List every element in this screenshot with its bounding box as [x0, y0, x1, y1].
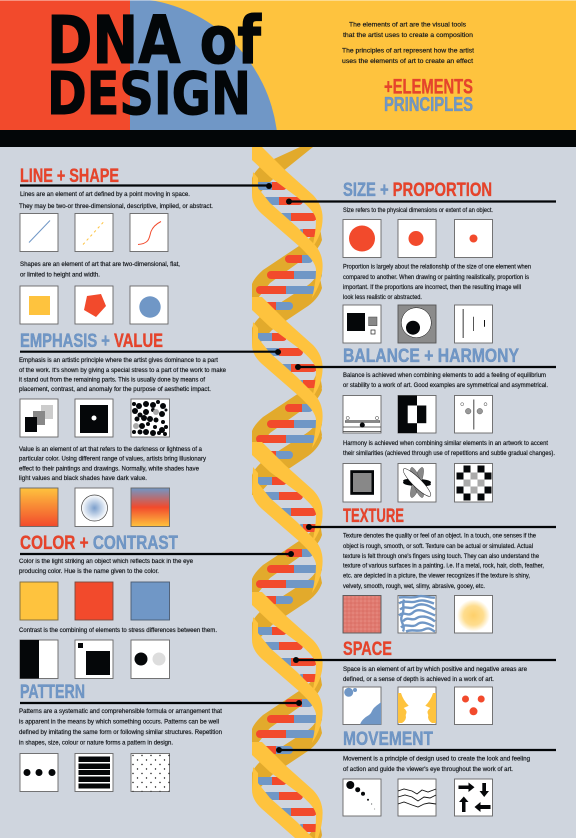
icon: blue wavy texture: [398, 596, 436, 633]
icon: black and white halves: [20, 640, 58, 678]
text: pattern: Patterns are a systematic and comprehensible formula or arrangement that: [19, 708, 222, 715]
icon: black square with white spot: [75, 399, 113, 437]
icon: eye circle: [398, 305, 436, 343]
text: value: [19, 446, 207, 482]
text: emphasis: [18, 357, 228, 393]
icon: yellow to red gradient: [20, 488, 58, 526]
icon: large circle: [343, 220, 381, 258]
callout lines: [20, 183, 556, 753]
panel: space: [343, 638, 527, 724]
text: color: producing color. Hue is the name given to the color.: [19, 568, 159, 575]
legend: elements and principles: +ELEMENTS: [384, 76, 473, 98]
icon: yellow swatch: [20, 582, 58, 620]
text: balance: [343, 372, 548, 389]
icon: small and large squares: [75, 640, 113, 678]
panel: size + proportion: [343, 179, 531, 343]
header intro text: The principles of art represent how the artist: [342, 48, 474, 54]
icon: three dots: [20, 754, 58, 792]
heading: space: SPACE: [343, 638, 392, 660]
icon: straight line: [20, 214, 58, 252]
text: space: Space is an element of art by which positive and negative areas are: [343, 666, 527, 673]
header intro text: [342, 22, 474, 65]
text: proportion: important. If the proportions are incorrect, then the resulting image will: [343, 284, 521, 291]
heading: texture: TEXTURE: [343, 505, 404, 527]
icon: blue red yellow gradient: [131, 488, 170, 526]
text: pattern: in shapes, size, colour or nature forms a pattern in design.: [19, 739, 173, 746]
icon: soft yellow blur: [454, 596, 492, 633]
icon: yellow facing profiles: [398, 687, 436, 724]
text: pattern: is apparent in the means by which something occurs. Patterns can be well: [19, 718, 219, 725]
text: texture: texture is felt through one's fingers using touch. They can also understand the: [343, 553, 539, 560]
text: line: Lines are an element of art defined by a point moving in space.: [20, 191, 190, 198]
icon: square: [20, 286, 58, 324]
text: shape: Shapes are an element of art that are two-dimensional, flat,: [20, 261, 180, 268]
icon: three vertical lines: [454, 305, 492, 343]
icon: balance scale: [343, 396, 381, 433]
icon: pentagon: [75, 286, 113, 324]
text: texture: [343, 532, 544, 590]
header banner: [0, 0, 576, 147]
icon: dot pattern: [131, 754, 170, 792]
text: space: defined, or a sense of depth is achieved in a work of art.: [343, 676, 494, 683]
text: texture: velvety, smooth, rough, wet, slimy, abrasive, gooey, etc.: [343, 583, 485, 590]
DNA helix: [252, 147, 323, 838]
icon: black and white symmetry: [398, 396, 436, 433]
icon: nested squares: [343, 464, 381, 502]
text: balance: or stability to a work of art. Good examples are symmetrical and asymmetrical.: [343, 382, 548, 389]
icon: petal flower: [398, 464, 436, 502]
text: emphasis: it stand out from the remaining parts. This is usually done by means of: [19, 376, 205, 384]
title: DESIGN: [47, 59, 251, 128]
text: movement: [343, 756, 530, 773]
icon: checkerboard: [454, 464, 492, 502]
text: pattern: defined by imitating the same form or following similar structures. Repetition: [19, 729, 222, 736]
text: emphasis: of the work. It's shown by giving a special stress to a part of the work to make: [19, 367, 226, 374]
icon: four arrows: [454, 779, 492, 816]
icon: medium circle: [398, 220, 436, 258]
text: harmony: [343, 440, 555, 457]
text: proportion: Proportion is largely about the relationship of the size of one element when: [343, 264, 531, 270]
icon: black and grey circles: [131, 640, 170, 678]
text: value: Value is an element of art that refers to the darkness or lightness of a: [19, 446, 202, 453]
text: proportion: [343, 264, 531, 301]
text: line: [19, 191, 213, 210]
text: texture: etc. are depicted in a picture, the viewer recognizes if the texture is shiny,: [343, 572, 530, 580]
text: color: Color is the light striking an object which reflects back in the eye: [19, 558, 193, 565]
icon: scattered dots: [131, 399, 170, 437]
text: texture: texture of various surfaces in a painting. i.e. If a metal, rock, hair, cloth, feather,: [343, 562, 544, 570]
legend: elements and principles: PRINCIPLES: [384, 94, 473, 116]
header intro text: uses the elements of art to create an effect: [342, 58, 473, 65]
icon: overlapping squares: [20, 399, 58, 437]
title: [47, 2, 262, 128]
icon: stripes: [75, 754, 113, 792]
text: emphasis: Emphasis is an artistic principle where the artist gives dominance to a part: [19, 357, 218, 364]
panel: balance + harmony: [343, 345, 555, 502]
text: value: particular color. Using different range of values, artists bring illusionary: [19, 456, 207, 462]
heading: line + shape: LINE + SHAPE: [20, 165, 119, 187]
heading: size + proportion: SIZE + PROPORTION: [343, 179, 492, 201]
icon: mirrored circles: [454, 396, 492, 433]
text: proportion: look less realistic or abstracted.: [343, 294, 422, 301]
text: shape: or limited to height and width.: [20, 272, 100, 278]
icon: three red dots: [454, 687, 492, 724]
icon: blue corner shapes: [343, 687, 381, 724]
icon: shrinking dots: [343, 779, 381, 816]
text: color: [18, 556, 196, 575]
icon: blue swatch: [131, 582, 170, 620]
icon: three squares: [343, 305, 381, 343]
text: shape: [20, 261, 180, 278]
text: texture: Texture denotes the quality or feel of an object. In a touch, one senses if the: [343, 532, 536, 540]
icon: dashed line: [75, 214, 113, 252]
icon: wavy lines: [398, 779, 436, 816]
heading: emphasis + value: EMPHASIS + VALUE: [20, 330, 163, 352]
panel: line + shape: [19, 165, 213, 324]
text: movement: Movement is a principle of design used to create the look and feeling: [343, 756, 530, 762]
icon: circle: [130, 286, 168, 324]
heading: color + contrast: COLOR + CONTRAST: [20, 532, 178, 554]
text: contrast: Contrast is the combining of elements to stress differences between them.: [19, 627, 217, 634]
text: size: Size refers to the physical dimensions or extent of an object.: [343, 207, 493, 214]
legend: elements and principles: [384, 76, 473, 116]
header intro text: that the artist uses to create a composition: [343, 32, 473, 39]
icon: red swatch: [75, 582, 113, 620]
icon: salmon texture: [343, 596, 381, 633]
text: harmony: Harmony is achieved when combining similar elements in an artwork to accent: [343, 440, 548, 447]
header intro text: The elements of art are the visual tools: [349, 22, 467, 28]
text: harmony: their similarities (achieved through use of repetitions and subtle gradual changes).: [343, 450, 555, 457]
panel: texture: [343, 505, 544, 633]
heading: balance + harmony: BALANCE + HARMONY: [343, 345, 519, 367]
icon: small circle: [454, 220, 492, 258]
text: space: [343, 666, 527, 683]
text: movement: of action and guide the viewer's eye throughout the work of art.: [343, 766, 513, 773]
text: texture: object is rough, smooth, or soft. Texture can be actual or simulated. Actual: [343, 543, 533, 550]
text: proportion: compared to another. When drawing or painting realistically, proportion is: [343, 274, 530, 281]
title: DNA of: [47, 2, 262, 79]
panel: movement: [343, 728, 530, 816]
text: value: effect to their paintings and drawings. Normally, white shades have: [19, 466, 199, 472]
panel: emphasis + value: [18, 330, 228, 526]
text: balance: Balance is achieved when combining elements to add a feeling of equilibrium: [343, 372, 546, 379]
text: value: light values and black shades have dark value.: [19, 475, 147, 482]
icon: radial blue sphere: [75, 488, 113, 526]
heading: movement: MOVEMENT: [343, 728, 433, 750]
panel: color + contrast: [18, 532, 217, 678]
text: pattern: [19, 708, 222, 746]
panel: pattern: [19, 681, 222, 792]
text: line: They may be two-or three-dimensional, descriptive, implied, or abstract.: [19, 203, 213, 210]
text: emphasis: placement, contrast, and anomaly for the purpose of aesthetic impact.: [19, 386, 211, 393]
icon: curved line: [130, 214, 168, 252]
heading: pattern: PATTERN: [20, 681, 85, 703]
